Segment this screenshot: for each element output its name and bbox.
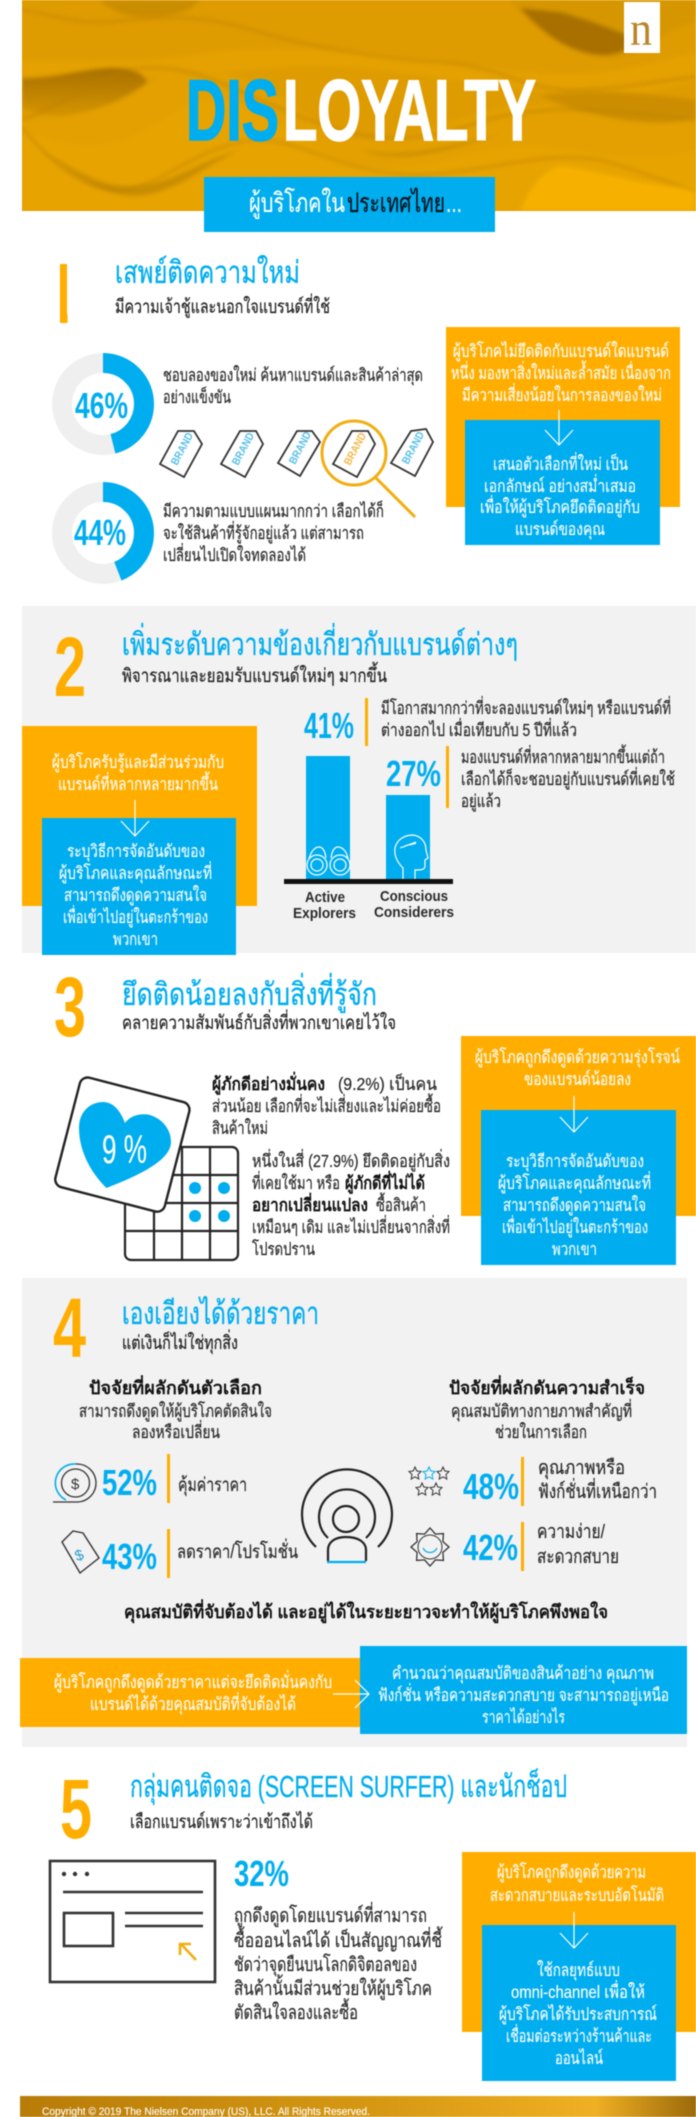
- callout 2 blue: เพื่อเข้าไปอยู่ในตะกร้าของ: [63, 905, 208, 928]
- heading 3: 3: [54, 960, 86, 1054]
- summary statement: คุณสมบัติที่จับต้องได้ และอยู่ได้ในระยะยาวจะทำให้ผู้บริโภคพึงพอใจ: [124, 1599, 608, 1624]
- arrow 2: [121, 800, 149, 836]
- donut 46%: [62, 363, 144, 445]
- callout 3 orange: [461, 1036, 696, 1216]
- text: one in four: ผู้ภักดีที่ไม่ได้: [345, 1170, 425, 1195]
- callout 3 blue: พวกเขา: [552, 1239, 597, 1259]
- heading 5: 5: [60, 1762, 92, 1856]
- callout 3 orange: ของแบรนด์น้อยลง: [524, 1069, 631, 1089]
- callout 2 orange: ผู้บริโภครับรู้และมีส่วนร่วมกับ: [52, 752, 224, 773]
- heading 1: มีความเจ้าชู้และนอกใจแบรนด์ที่ใช้: [115, 293, 330, 318]
- text: one in four: อยากเปลี่ยนแปลง: [252, 1192, 368, 1215]
- heading 2: พิจารณาและยอมรับแบรนด์ใหม่ๆ มากขึ้น: [122, 662, 387, 687]
- callout 1 blue: แบรนด์ของคุณ: [515, 519, 605, 540]
- hero banner: [22, 0, 696, 232]
- subtitle box: ผู้บริโภคใน: [249, 187, 345, 219]
- text: one in four: เหมือนๆ เดิม และไม่เปลี่ยนจากสิ่งที่: [252, 1215, 450, 1237]
- icon: heart card 9%: [54, 1076, 191, 1213]
- subtitle box: [204, 177, 495, 232]
- left column heading: ลองหรือเปลี่ยน: [132, 1420, 220, 1442]
- brand tags: BRAND: [287, 430, 314, 466]
- callout 4 blue: [360, 1646, 687, 1734]
- left column heading: [79, 1375, 272, 1442]
- callout 5 orange: [462, 1852, 696, 2032]
- text: loyalists: [212, 1071, 441, 1138]
- callout 1 blue: [465, 420, 660, 545]
- wavy gold background: [22, 0, 696, 211]
- heading 4: แต่เงินก็ไม่ใช่ทุกสิ่ง: [122, 1329, 238, 1355]
- callout 3 blue: ระบุวิธีการจัดอันดับของ: [506, 1151, 644, 1172]
- stat 42%: ความง่าย/: [537, 1521, 605, 1543]
- stat 41%: [304, 696, 671, 746]
- callout 2 blue: ผู้บริโภคและคุณลักษณะที่: [59, 861, 212, 884]
- callout 3 blue: สามารถดึงดูดความสนใจ: [503, 1195, 646, 1216]
- text: loyalists: ส่วนน้อย เลือกที่จะไม่เสี่ยงและไม่ค่อยซื้อ: [212, 1093, 441, 1116]
- stat 32%: ซื้อออนไลน์ได้ เป็นสัญญาณที่ชี้: [234, 1926, 443, 1952]
- text: loyalists: ผู้ภักดีอย่างมั่นคง: [212, 1071, 325, 1096]
- text: one in four: [252, 1149, 450, 1259]
- label: conscious considerers: Conscious: [380, 888, 448, 905]
- callout 4 blue: ราคาได้อย่างไร: [482, 1707, 565, 1727]
- section 1: [59, 247, 680, 574]
- icon: stars: [409, 1467, 449, 1495]
- label: active explorers: Active: [305, 889, 345, 906]
- callout 2 orange: แบรนด์ที่หลากหลายมากขึ้น: [58, 771, 218, 794]
- title: DIS: [186, 63, 279, 159]
- stat 32%: สินค้านั้นมีส่วนช่วยให้ผู้บริโภค: [234, 1974, 432, 2001]
- donut 44%: [62, 492, 144, 574]
- right column heading: ช่วยในการเลือก: [495, 1422, 587, 1442]
- title: LOYALTY: [283, 63, 536, 159]
- section 4 panel: [22, 1278, 687, 1747]
- text: loyalists: (9.2%) เป็นคน: [338, 1073, 437, 1094]
- text 44%: [163, 500, 384, 565]
- right column heading: ปัจจัยที่ผลักดันความสำเร็จ: [449, 1375, 645, 1398]
- icon: coin: [53, 1464, 96, 1502]
- icon: person with signal arcs: [302, 1469, 392, 1562]
- heading 2: 2: [54, 620, 86, 714]
- text: loyalists: สินค้าใหม่: [212, 1118, 268, 1138]
- heading 1: 1: [59, 247, 68, 341]
- brand tags: BRAND: [400, 430, 427, 466]
- icon: heart card 9%: 9 %: [102, 1128, 147, 1172]
- text 46%: [163, 365, 423, 407]
- callout 1 blue: เสนอตัวเลือกที่ใหม่ เป็น: [493, 452, 628, 474]
- text: one in four: ซื้อสินค้า: [376, 1192, 426, 1215]
- stat 32%: 32%: [234, 1853, 289, 1894]
- stat 52%: 52%: [102, 1462, 157, 1503]
- heading 4: [53, 1281, 319, 1375]
- callout 5 orange: ผู้บริโภคถูกดึงดูดด้วยความ: [497, 1862, 646, 1883]
- callout 2 blue: พวกเขา: [113, 929, 158, 949]
- text: one in four: โปรดปราน: [252, 1239, 315, 1259]
- stat 32%: ถูกดึงดูดโดยแบรนด์ที่สามารถ: [234, 1902, 427, 1928]
- stat 32%: [234, 1853, 443, 2024]
- left column heading: ปัจจัยที่ผลักดันตัวเลือก: [89, 1375, 262, 1398]
- footer: [20, 2096, 696, 2117]
- callout 4 orange: แบรนด์ได้ด้วยคุณสมบัติที่จับต้องได้: [90, 1692, 296, 1715]
- right column heading: [449, 1375, 645, 1442]
- stat 42%: สะดวกสบาย: [537, 1546, 619, 1568]
- stat 27%: 27%: [386, 753, 441, 794]
- heading 1: [59, 247, 330, 341]
- stat 32%: ตัดสินใจลองและซื้อ: [234, 1998, 358, 2024]
- donut 46%: 46%: [75, 385, 128, 426]
- heading 4: 4: [53, 1281, 86, 1375]
- callout 1 blue: เอกลักษณ์ อย่างสม่ำเสมอ: [484, 474, 636, 496]
- callout 4 orange: [20, 1658, 361, 1727]
- stat 41%: ต่างออกไป เมื่อเทียบกับ 5 ปีที่แล้ว: [381, 718, 577, 740]
- callout 4 orange: ผู้บริโภคถูกดึงดูดด้วยราคาแต่จะยึดติดมั่นคงกับ: [54, 1670, 332, 1693]
- text 44%: มีความตามแบบแผนมากกว่า เลือกได้ก็: [163, 500, 384, 521]
- stat 52%: [53, 1454, 247, 1503]
- icon: price tag: $: [73, 1546, 87, 1565]
- heading 3: คลายความสัมพันธ์กับสิ่งที่พวกเขาเคยไว้ใจ: [122, 1009, 396, 1034]
- brand tags: BRAND: [230, 431, 257, 467]
- stat 42%: 42%: [463, 1527, 518, 1568]
- callout 3 blue: ผู้บริโภคและคุณลักษณะที่: [498, 1171, 651, 1194]
- brand tags: BRAND: [342, 431, 369, 467]
- right column heading: คุณสมบัติทางกายภาพสำคัญที่: [451, 1399, 632, 1422]
- brand tags: [160, 429, 433, 477]
- text 46%: อย่างแข็งขัน: [163, 386, 231, 407]
- callout 1 orange: [446, 327, 680, 507]
- callout 5 blue: omni-channel เพื่อให้: [511, 1980, 645, 2002]
- heading 5: [60, 1762, 567, 1856]
- stat 48%: คุณภาพหรือ: [538, 1457, 625, 1480]
- heading 2: เพิ่มระดับความข้องเกี่ยวกับแบรนด์ต่างๆ: [122, 623, 518, 662]
- heading 5: เลือกแบรนด์เพราะว่าเข้าถึงได้: [130, 1811, 313, 1833]
- logo: [624, 2, 660, 56]
- callout 5 blue: ออนไลน์: [555, 2048, 603, 2068]
- stat 43%: [62, 1529, 298, 1578]
- callout 2 blue: ระบุวิธีการจัดอันดับของ: [67, 841, 205, 862]
- arrow 4: [333, 1680, 369, 1708]
- callout 1 blue: เพื่อให้ผู้บริโภคยึดติดอยู่กับ: [480, 495, 640, 518]
- label: conscious considerers: [374, 888, 454, 921]
- title: [186, 63, 536, 159]
- label: active explorers: [293, 889, 356, 922]
- heading 3: ยึดติดน้อยลงกับสิ่งที่รู้จัก: [122, 973, 377, 1013]
- text: one in four: ที่เคยใช้มา หรือ: [252, 1171, 340, 1193]
- stat 32%: ชัดว่าจุดยืนบนโลกดิจิตอลของ: [234, 1953, 417, 1977]
- brand tags: BRAND: [169, 431, 196, 467]
- stat 48%: 48%: [463, 1466, 519, 1507]
- text 44%: เปลี่ยนไปเปิดใจทดลองได้: [163, 543, 306, 565]
- subtitle box: ...: [446, 188, 462, 218]
- heading 2: [54, 620, 518, 714]
- icon: coin: $: [71, 1476, 80, 1493]
- icon: head: [395, 835, 428, 879]
- callout 3 blue: [481, 1110, 676, 1265]
- stat 42%: [411, 1521, 619, 1571]
- callout 5 blue: ผู้บริโภคได้รับประสบการณ์: [499, 2004, 657, 2025]
- left column heading: สามารถดึงดูดให้ผู้บริโภคตัดสินใจ: [79, 1401, 272, 1422]
- callout 5 blue: ใช้กลยุทธ์แบบ: [537, 1960, 620, 1981]
- subtitle box: ประเทศไทย: [347, 188, 445, 218]
- stat 52%: คุ้มค่าราคา: [178, 1475, 247, 1497]
- heading 4: เองเอียงได้ด้วยราคา: [122, 1296, 319, 1331]
- donut 44%: 44%: [74, 512, 126, 553]
- arrow 1: [545, 410, 573, 445]
- magnifier: [322, 421, 415, 517]
- section 5: [50, 1762, 696, 2081]
- stat 48%: ฟังก์ชั่นที่เหนือกว่า: [538, 1478, 657, 1503]
- stat 43%: 43%: [102, 1536, 157, 1577]
- callout 2 blue: สามารถดึงดูดความสนใจ: [64, 885, 207, 906]
- logo: n: [630, 3, 652, 56]
- stat 41%: 41%: [304, 705, 354, 746]
- text: one in four: หนึ่งในสี่ (27.9%) ยึดติดอยู่กับสิ่ง: [252, 1149, 450, 1172]
- arrow 5: [560, 1912, 588, 1948]
- stat 43%: ลดราคา/โปรโมชั่น: [177, 1538, 298, 1563]
- callout 2 blue: [42, 818, 236, 955]
- stat 48%: [409, 1457, 657, 1507]
- icon: browser window: [50, 1861, 215, 1982]
- stat 27%: อยู่แล้ว: [461, 791, 501, 812]
- bar chart: [284, 756, 454, 922]
- callout 5 blue: [482, 1925, 676, 2081]
- icon: price tag: [62, 1531, 99, 1573]
- section 3: [54, 960, 696, 1265]
- text 44%: จะใช้สินค้าที่รู้จักอยู่แล้ว แต่สามารถ: [163, 521, 364, 544]
- icon: sun: [411, 1528, 449, 1566]
- heading 3: [54, 960, 396, 1054]
- stat 27%: [386, 744, 675, 812]
- callout 2 orange: [22, 726, 257, 906]
- arrow 3: [560, 1096, 588, 1132]
- callout 3 blue: เพื่อเข้าไปอยู่ในตะกร้าของ: [502, 1215, 648, 1238]
- label: active explorers: Explorers: [293, 905, 356, 922]
- text 46%: ชอบลองของใหม่ ค้นหาแบรนด์และสินค้าล่าสุด: [163, 365, 423, 386]
- section 2 panel: [22, 606, 696, 955]
- label: conscious considerers: Considerers: [374, 904, 454, 921]
- icon: grid with dots: [125, 1147, 238, 1260]
- heading 1: เสพย์ติดความใหม่: [115, 255, 300, 290]
- icon: binoculars: [307, 847, 350, 875]
